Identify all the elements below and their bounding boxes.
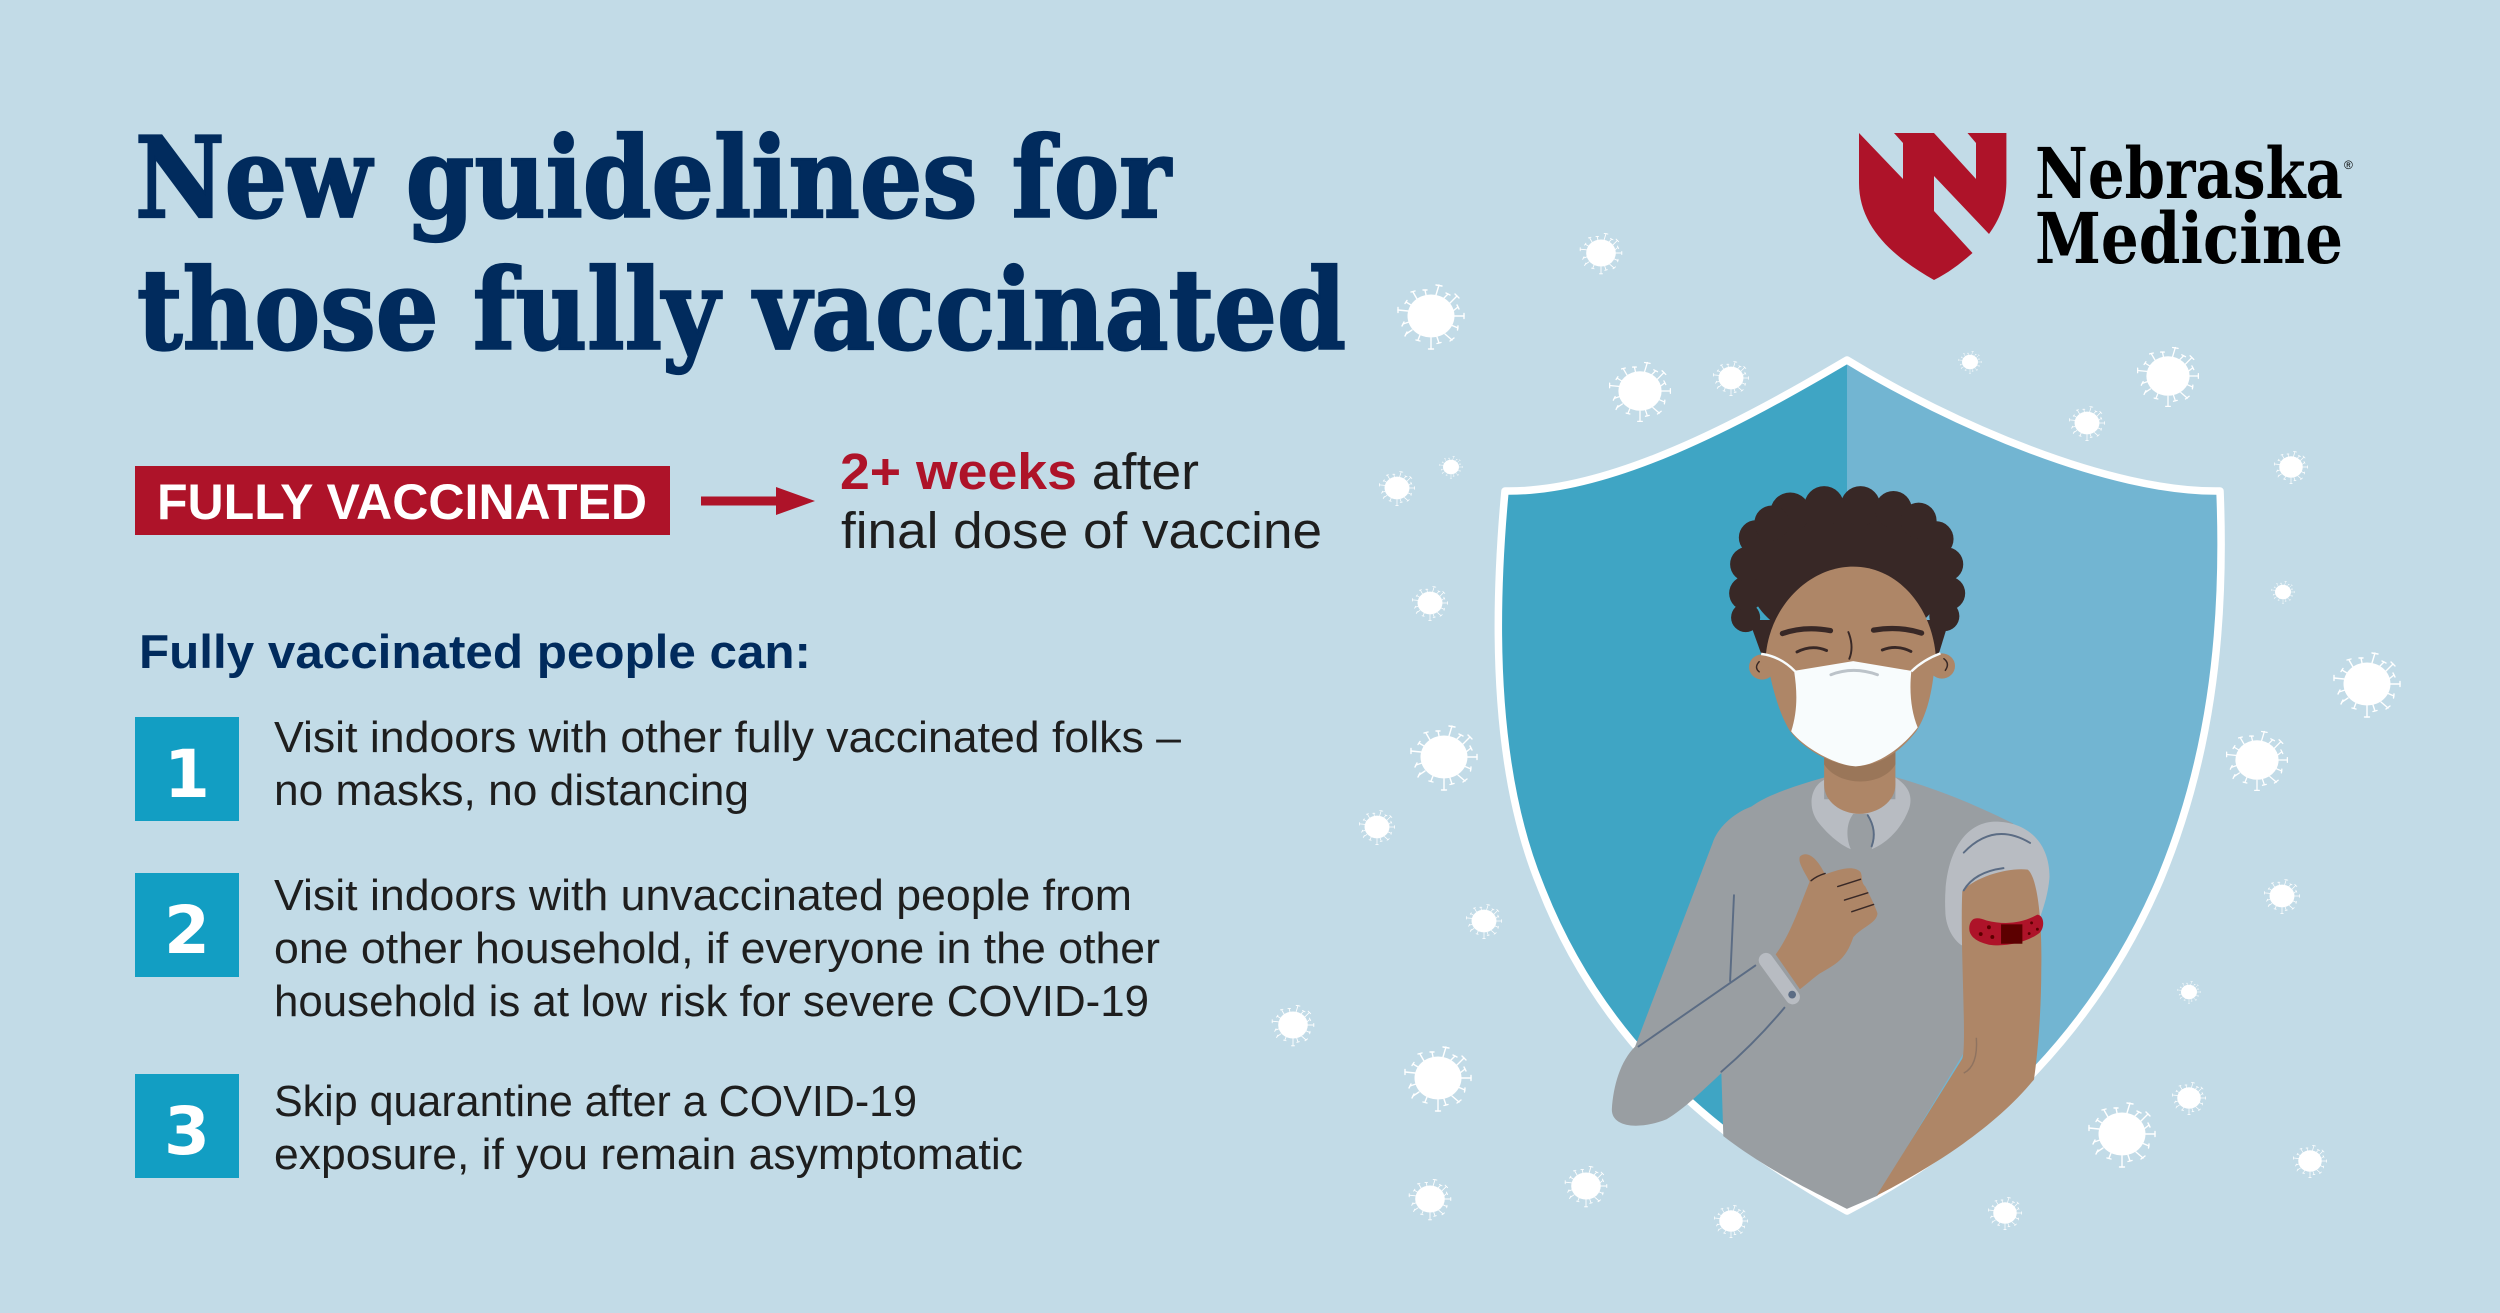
list item 2: Visit indoors with unvaccinated people from [274, 871, 1132, 920]
person [1612, 486, 2050, 1209]
list item 1: Visit indoors with other fully vaccinated folks – [274, 713, 1182, 762]
wordmark: Nebraska [2035, 132, 2343, 215]
list item 3: 3 [164, 1093, 210, 1170]
icon: virus particles [1272, 233, 2400, 1238]
arm fold [1964, 1038, 1977, 1073]
cuff [1766, 960, 1796, 999]
ears [1749, 653, 1955, 680]
title [135, 114, 1346, 376]
list item 3 [135, 1074, 1023, 1179]
definition text: 2+ weeks after [840, 443, 1199, 500]
list item 1: no masks, no distancing [274, 766, 749, 815]
subheading: Fully vaccinated people can: [139, 625, 811, 678]
bare arm [1876, 869, 2041, 1196]
list item 2: 2 [164, 892, 210, 969]
neck [1824, 746, 1895, 814]
upper sleeve [1945, 822, 2050, 946]
hand with thumb up [1776, 854, 1877, 989]
badge: fully vaccinated: FULLY VACCINATED [157, 474, 647, 530]
list item 2: one other household, if everyone in the other [274, 924, 1160, 973]
facial features [1757, 628, 1947, 672]
arrow [701, 487, 815, 515]
title: New guidelines for [135, 114, 1172, 244]
torso [1612, 777, 2013, 1209]
hair [1729, 486, 1965, 656]
list item 2 [135, 871, 1160, 1026]
bandage [1969, 915, 2043, 945]
logo: Nebraska Medicine [1859, 132, 2353, 280]
sleeve lines [1638, 834, 2030, 1072]
title: those fully vaccinated [137, 246, 1346, 376]
list item 3: exposure, if you remain asymptomatic [274, 1130, 1023, 1179]
face mask [1761, 653, 1940, 766]
shield [1480, 340, 2247, 1240]
definition text: final dose of vaccine [841, 502, 1322, 559]
wordmark: Medicine [2035, 197, 2343, 280]
list item 3: Skip quarantine after a COVID-19 [274, 1077, 917, 1126]
definition text [840, 443, 1322, 559]
face [1766, 567, 1936, 766]
wordmark: ® [2344, 158, 2353, 172]
list item 2: household is at low risk for severe COVID-19 [274, 977, 1149, 1026]
icon: red N shield [1859, 133, 2006, 280]
wordmark [2035, 132, 2353, 280]
list item 1 [135, 713, 1182, 821]
collar [1812, 777, 1910, 849]
list item 1: 1 [164, 736, 210, 813]
